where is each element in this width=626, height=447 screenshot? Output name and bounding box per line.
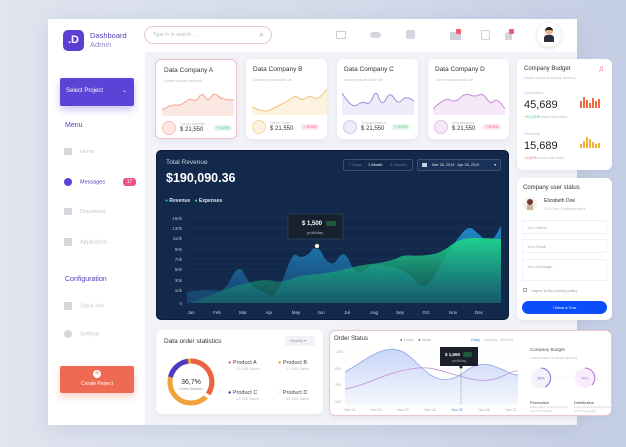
panel: total revenue chart: Dec (475, 310, 484, 315)
panel: data order statistics: 12,345 Sales (236, 396, 259, 401)
panel: order status: Nov 02 (370, 408, 382, 412)
panel: total revenue chart: 7 Days (349, 162, 361, 167)
panel: order status: Nov 04 (424, 408, 436, 412)
panel: order status: 50% (537, 376, 545, 380)
panel: order status: profit/day (452, 359, 466, 363)
card: Data Company C: Transportation (361, 120, 387, 125)
card: Data Company D: + 10,5% (486, 125, 498, 129)
sidebar menu: Stack dev (80, 303, 104, 309)
sidebar menu: Home (80, 149, 95, 155)
panel: company user status: I Want a Tour (553, 305, 576, 310)
panel: company user status: I agree to the privacy policy (531, 289, 577, 293)
panel: total revenue chart: Feb (213, 310, 221, 315)
panel: order status: Lorem ipsum is simply dummy text of the printing (574, 405, 612, 412)
panel: company budget: -2,02% since last days (524, 155, 564, 160)
sidebar menu (64, 122, 136, 338)
card: Data Company B: Lorem ipsum dolor sit (253, 77, 291, 82)
panel: data order statistics: Orders Statistics (179, 387, 203, 391)
brand text: Dashboard (90, 31, 127, 40)
main window (48, 19, 577, 425)
panel: data order statistics: 12,345 Sales (286, 396, 309, 401)
card: Data Company B: $ 21,550 (270, 126, 293, 132)
card: Data Company A: Lorem ipsum dolor sit (164, 78, 202, 83)
sidebar menu: Document (80, 209, 105, 215)
sidebar menu: Messages (80, 179, 105, 185)
panel: total revenue chart: profit/day (307, 230, 323, 235)
panel: company budget: +10,22% since last days (524, 114, 567, 119)
panel: company budget: 45,689 (524, 99, 558, 111)
panel: total revenue chart: Aug (370, 310, 378, 315)
panel: order status: Lorem ipsum is simply dummy (530, 356, 577, 360)
panel: total revenue chart: Jan (187, 310, 195, 315)
panel: order status: 40% (581, 376, 589, 380)
panel: order status: Company Budget (530, 347, 565, 352)
panel: order status: Nov 03 (397, 408, 409, 412)
panel: company user status: CEO Your Company Name (544, 207, 586, 211)
card: Data Company D (428, 59, 509, 139)
card: Data Company D: Maintenance (452, 120, 475, 125)
create project button (60, 366, 134, 393)
panel: total revenue chart: 90k (175, 247, 183, 252)
search box: Type in to search ... (153, 32, 197, 38)
panel: order status: Order Status (334, 336, 368, 342)
panel: total revenue chart: 3 Months (390, 162, 406, 167)
panel: company budget: Products (524, 131, 540, 136)
panel: total revenue chart: Jun (317, 310, 325, 315)
panel: data order statistics: Data order statistics (164, 338, 221, 345)
panel: total revenue chart (156, 150, 509, 320)
panel: total revenue chart: $190,090.36 (166, 171, 236, 185)
panel: company budget (517, 59, 612, 170)
panel: data order statistics: 12,345 Sales (286, 366, 309, 371)
panel: total revenue chart: 50k (175, 267, 183, 272)
panel: data order statistics: ● Product D (278, 390, 307, 396)
select project button (60, 78, 134, 106)
card: Data Company C: Lorem ipsum dolor sit (344, 77, 382, 82)
panel: company budget: Company Budget (524, 66, 570, 72)
panel: company budget: ♫ (598, 64, 604, 73)
card: Data Company B (246, 59, 327, 139)
panel: data order statistics (156, 330, 323, 414)
card: Data Company D: Lorem ipsum dolor sit (435, 77, 473, 82)
panel: total revenue chart: 1 Month (368, 162, 382, 167)
card: Data Company A: Cargo transfer (180, 121, 206, 126)
panel: total revenue chart: 0 (179, 301, 182, 306)
create project button: Create Project (81, 381, 113, 387)
avatar (537, 23, 561, 47)
card: Data Company C (337, 59, 418, 139)
header icons (336, 29, 514, 40)
panel: total revenue chart: Apr (265, 310, 273, 315)
panel: total revenue chart: 130k (172, 226, 183, 231)
panel: company budget: Customers (524, 90, 543, 95)
card: Data Company A: + 10,5% (217, 126, 229, 130)
panel: data order statistics: 36,7% (181, 379, 201, 386)
create project button: + (95, 370, 99, 377)
panel: order status: Production (530, 400, 549, 405)
panel: order status: 100 (335, 400, 341, 404)
panel: total revenue chart: Jul (344, 310, 350, 315)
panel: total revenue chart: 150k (172, 216, 183, 221)
search box: ⌕ (260, 30, 264, 39)
card: Data Company C: Data Company C (344, 66, 394, 73)
panel: total revenue chart: 10k (175, 288, 183, 293)
content area background (145, 52, 577, 425)
panel: order status: Nov 06 (478, 408, 490, 412)
panel: order status: Distribution (574, 400, 594, 405)
panel: company budget: 15,689 (524, 140, 558, 152)
panel: total revenue chart: ● Revenue ● Expenses (165, 198, 222, 204)
card: Data Company B: Data Company B (253, 66, 302, 73)
panel: total revenue chart: May (292, 310, 301, 315)
panel: company user status (517, 178, 612, 320)
panel: company budget: Lorem Ipsum is simply dummy (524, 76, 575, 80)
panel: total revenue chart: Nov (449, 310, 458, 315)
sidebar menu: Configuration (65, 276, 107, 283)
panel: total revenue chart: Mar 26, 2019 - Apr 26, 2019 (432, 163, 479, 167)
sidebar menu: 17 (127, 179, 132, 185)
panel: company user status: Your Email (527, 244, 546, 249)
card: Data Company C: $ 21,550 (361, 126, 384, 132)
select project button: ⌄ (122, 88, 127, 94)
panel: order status: Nov 01 (344, 408, 356, 412)
sidebar menu: Settings (80, 331, 100, 337)
brand text: Admin (90, 40, 111, 49)
panel: company user status: Your Message (527, 264, 552, 269)
card: Data Company A (155, 59, 237, 139)
panel: total revenue chart: 110k (173, 236, 183, 241)
card: Data Company B: Office Daily (270, 120, 290, 125)
panel: order status: Nov 05 (451, 408, 463, 412)
panel: company user status: Company user status (523, 185, 580, 191)
card: Data Company C: + 10,5% (395, 125, 407, 129)
panel: data order statistics: 12,345 Sales (236, 366, 259, 371)
card: Data Company B: + 10,5% (304, 125, 316, 129)
panel: order status: $ 1,550 (445, 352, 461, 357)
panel: total revenue chart: ▾ (494, 163, 496, 167)
card: Data Company D: $ 21,550 (452, 126, 475, 132)
brand text (90, 31, 127, 49)
panel: total revenue chart: Total Revenue (166, 159, 208, 166)
panel: total revenue chart: 70k (175, 257, 183, 262)
panel: total revenue chart: $ 1,500 (302, 221, 323, 227)
card: Data Company A: Data Company A (164, 67, 213, 74)
sidebar menu: Application (80, 239, 107, 245)
panel: data order statistics: Weekly ▾ (290, 338, 306, 343)
logo (63, 30, 84, 51)
panel: order status: Lorem ipsum is simply dummy text of the printing (530, 405, 568, 412)
search box (144, 26, 272, 44)
panel: order status: ● Order ● Store (400, 337, 431, 342)
panel: total revenue chart: Oct (422, 310, 430, 315)
panel: order status: Nov 07 (505, 408, 517, 412)
panel: order status: Daily Weekly Monthly (471, 337, 514, 342)
panel: order status: 1000 (335, 350, 343, 354)
panel: order status: 300 (335, 383, 341, 387)
card: Data Company D: Data Company D (435, 66, 485, 73)
panel: data order statistics: ● Product C (228, 390, 257, 396)
panel: order status: 600 (335, 367, 341, 371)
panel: data order statistics: ● Product A (228, 360, 257, 366)
panel: company user status: Your Name (527, 225, 547, 230)
card: Data Company A: $ 21,550 (180, 127, 203, 133)
select project button: Select Project (66, 88, 103, 94)
panel: data order statistics: ● Product B (278, 360, 307, 366)
panel: total revenue chart: Mar (239, 310, 247, 315)
panel: total revenue chart: Sep (396, 310, 404, 315)
panel: total revenue chart: 30k (175, 278, 183, 283)
sidebar menu: Menu (65, 122, 83, 129)
panel: company user status: Elizabeth Doe (544, 198, 575, 204)
panel: order status (329, 330, 612, 416)
logo: .D (68, 34, 79, 46)
